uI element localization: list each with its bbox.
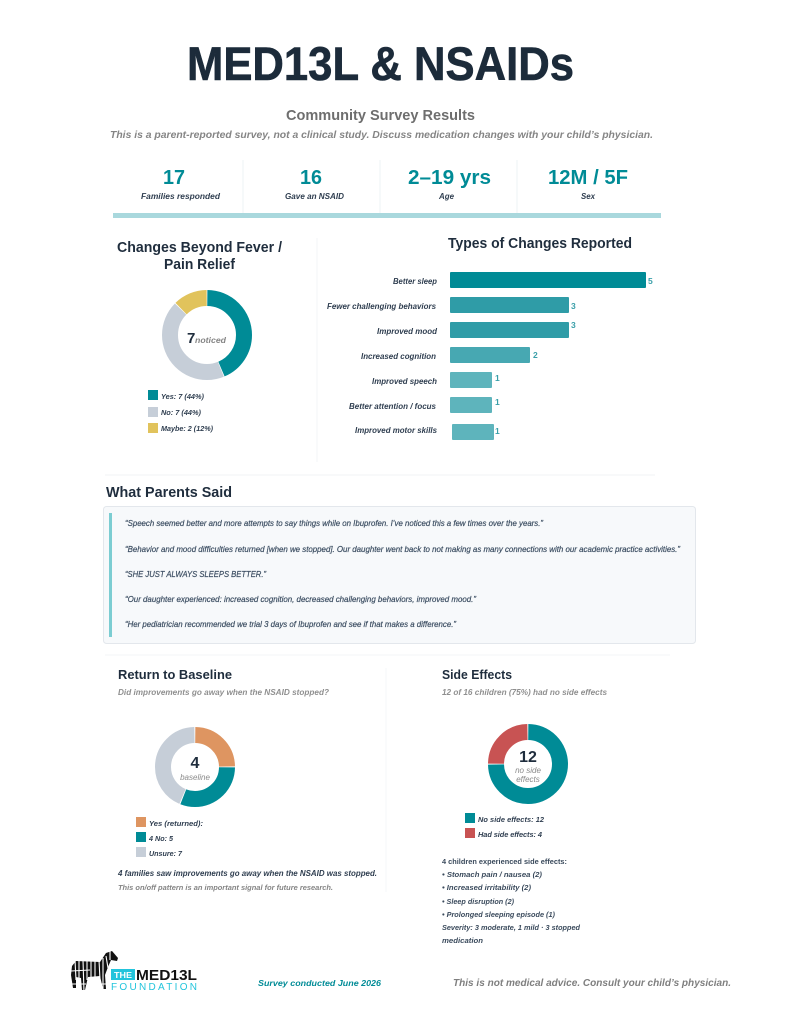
logo: MED13L Foundation [71,951,197,993]
quote 1: “Speech seemed better and more attempts to say things while on Ibuprofen. I’ve noticed this a few times over the years.” [125,519,543,528]
legend: side effects: No side effects: 12 [478,815,545,824]
heading: what parents said: What Parents Said [106,485,232,501]
disclaimer: This is a parent-reported survey, not a clinical study. Discuss medication changes with your child’s physician. [110,129,653,141]
donut: side effects: effects [516,775,540,784]
subtitle: Community Survey Results [286,107,475,124]
side effects list: 4 children experienced side effects: [442,857,567,866]
stat: age [408,167,491,201]
panel: parent quotes [104,506,696,644]
donut: return to baseline: 4 [191,755,200,772]
bar: improved motor skills [355,424,500,440]
quote 5: “Her pediatrician recommended we trial 3 days of Ibuprofen and see if that makes a difference.” [125,620,456,629]
donut: side effects: 12 [519,749,537,766]
heading: changes beyond fever: Pain Relief [164,257,235,273]
side effects list: • Prolonged sleeping episode (1) [442,910,555,919]
legend: side effects [465,813,545,839]
stat: gave an NSAID: 16 [300,167,322,189]
bar: better attention [349,397,500,413]
bar: fewer challenging behaviors: 3 [571,301,576,311]
quote 2: “Behavior and mood difficulties returned [when we stopped]. Our daughter went back to not making as many connections with our academic practice activities.” [125,545,680,554]
legend: changes noticed: No: 7 (44%) [161,408,202,417]
legend: side effects: Had side effects: 4 [478,830,542,839]
bar: improved motor skills: 1 [495,426,500,436]
donut: side effects: no side [515,766,541,775]
stat: sex [548,167,628,201]
heading: types of changes: Types of Changes Reported [448,236,632,252]
bar chart: types of changes [327,272,653,440]
bar: fewer challenging behaviors: Fewer challenging behaviors [327,302,437,311]
footer: survey date: Survey conducted June 2026 [258,978,381,988]
heading: changes beyond fever [117,240,282,273]
donut: changes noticed: noticed [195,335,227,345]
stat: families responded: Families responded [141,192,220,201]
donut: changes noticed: 7 [187,330,195,347]
donut: side effects [496,732,560,796]
subheading: return to baseline: Did improvements go away when the NSAID stopped? [118,687,330,697]
heading: changes beyond fever: Changes Beyond Fever / [117,240,282,256]
legend: changes noticed [148,390,214,433]
stat: age: 2–19 yrs [408,167,491,189]
logo wordmark: MED13L [136,967,197,984]
bar: improved mood [377,320,576,338]
bar: improved motor skills: Improved motor skills [355,426,438,435]
bar: fewer challenging behaviors [327,297,576,313]
note: return to baseline: This on/off pattern is an important signal for future research. [118,883,333,892]
legend: changes noticed: Maybe: 2 (12%) [161,424,214,433]
stat: families responded [141,167,220,201]
icon: zebra [71,951,118,992]
quote 3: “SHE JUST ALWAYS SLEEPS BETTER.” [125,570,266,579]
bar: improved speech: 1 [495,373,500,383]
bar: increased cognition: Increased cognition [361,352,436,361]
legend: return to baseline: Unsure: 7 [149,849,183,858]
subheading: side effects: 12 of 16 children (75%) had no side effects [442,687,607,697]
stats row [141,160,628,213]
donut: return to baseline: baseline [180,773,210,782]
logo badge: THE: THE [114,971,133,980]
bar: improved mood: Improved mood [377,327,437,336]
stat: sex: 12M / 5F [548,167,628,189]
legend: return to baseline: 4 No: 5 [148,834,174,843]
stat: sex: Sex [581,192,596,201]
legend: changes noticed: Yes: 7 (44%) [161,392,205,401]
donut: return to baseline [163,735,227,799]
title: MED13L & NSAIDs [187,37,574,90]
footer: disclaimer: This is not medical advice. Consult your child’s physician. [453,977,731,989]
finding: return to baseline: 4 families saw improvements go away when the NSAID was stopped. [117,869,377,878]
bar: better sleep: 5 [648,276,653,286]
heading: return to baseline: Return to Baseline [118,667,232,682]
stat: gave an NSAID [285,167,344,201]
stat: age: Age [438,192,455,201]
side effects list: Severity: 3 moderate, 1 mild · 3 stopped [442,923,580,932]
heading: side effects: Side Effects [442,667,512,682]
side effects list: • Stomach pain / nausea (2) [442,870,542,879]
bar: improved mood: 3 [571,320,576,330]
bar: improved speech [372,372,500,388]
side effects list: • Sleep disruption (2) [442,897,514,906]
bar: better attention: Better attention / focus [349,402,437,411]
donut: changes noticed [170,298,244,372]
stat: families responded: 17 [163,167,185,189]
side effects list: • Increased irritability (2) [442,883,531,892]
quote 4: “Our daughter experienced: increased cognition, decreased challenging behaviors, improved mood.” [125,595,476,604]
bar: increased cognition: 2 [533,350,538,360]
stats underline bar [113,213,661,218]
bar: improved speech: Improved speech [372,377,437,386]
bar: better attention: 1 [495,397,500,407]
stat: gave an NSAID: Gave an NSAID [285,192,344,201]
legend: return to baseline: Yes (returned): [149,819,204,828]
bar: better sleep [393,272,653,288]
legend: return to baseline [136,817,204,858]
logo foundation: FOUNDATION [111,982,197,993]
bar: increased cognition [361,347,538,363]
side effects list: medication [442,936,483,945]
side effects list [442,857,580,945]
bar: better sleep: Better sleep [393,277,437,286]
